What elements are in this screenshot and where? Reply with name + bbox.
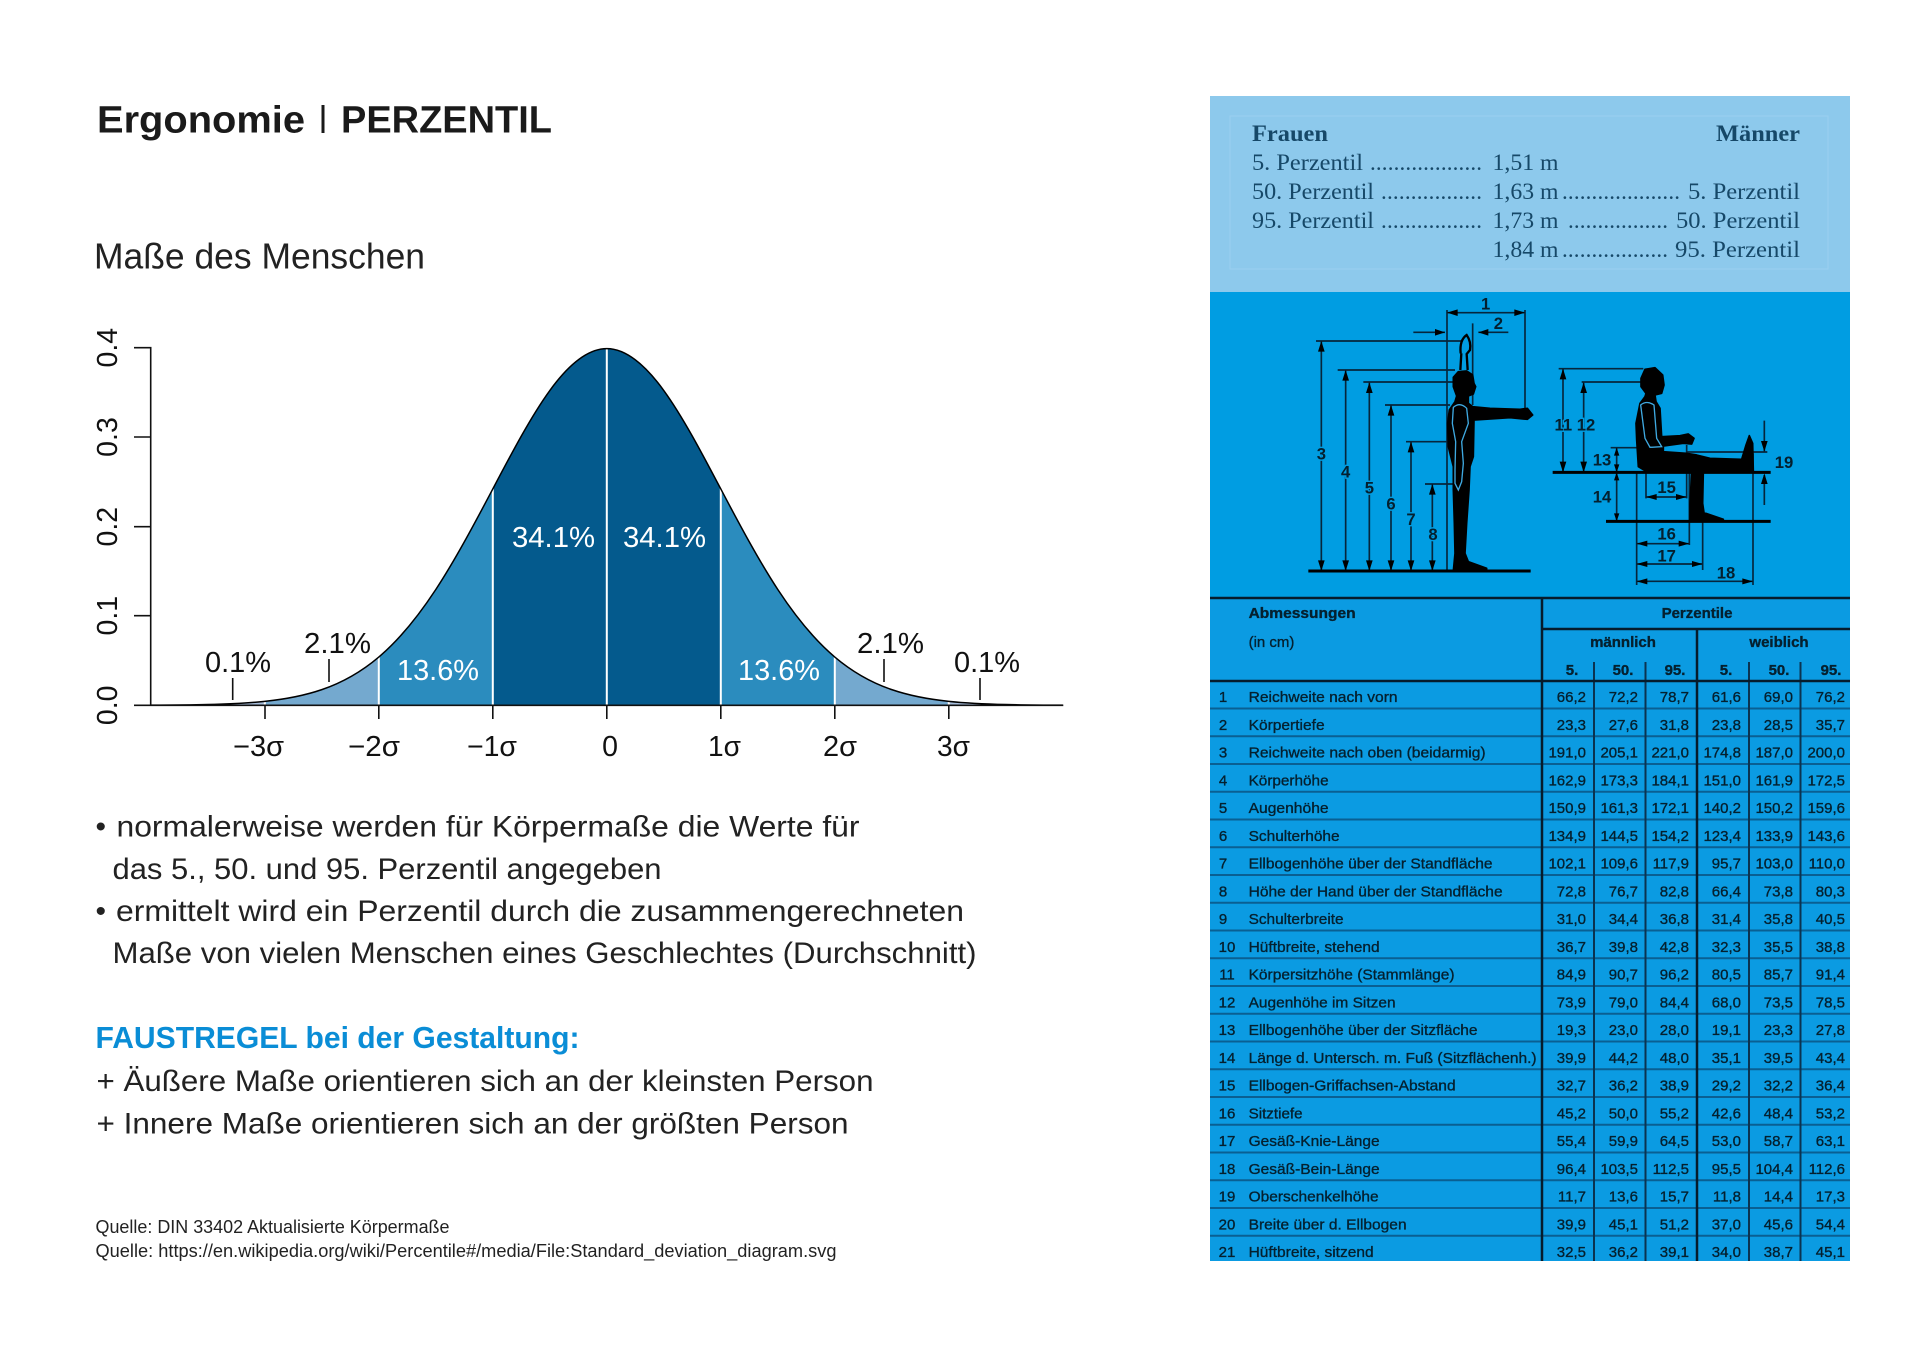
row 4: 162,9 [1548, 772, 1586, 789]
row 17: 55,4 [1557, 1133, 1586, 1150]
sources [96, 1217, 836, 1262]
row 2 [1219, 717, 1845, 734]
panel: percentile heights: ................. [1381, 179, 1482, 204]
row 16: Sitztiefe [1249, 1105, 1303, 1122]
row 18: 96,4 [1557, 1161, 1586, 1178]
row 10: 39,8 [1609, 939, 1638, 956]
table header: Perzentile [1662, 605, 1732, 622]
curve outline [151, 349, 1063, 705]
panel: percentile heights: ................... [1370, 150, 1482, 175]
row 21: 21 [1219, 1244, 1235, 1261]
row 21: 45,1 [1816, 1244, 1845, 1261]
percent labels inside: 34.1% [512, 522, 595, 554]
panel: percentile heights: 50. Perzentil [1252, 179, 1374, 204]
axes: 0.2 [92, 507, 124, 547]
row 5: 159,6 [1807, 800, 1845, 817]
row 19: 13,6 [1609, 1188, 1638, 1206]
axes: 0.3 [92, 417, 124, 457]
row 5: 150,9 [1548, 800, 1586, 817]
bell curve chart [92, 328, 1063, 763]
panel: percentile heights: 1,63 m [1492, 179, 1559, 204]
row 16: 42,6 [1712, 1105, 1741, 1122]
row 14: 35,1 [1712, 1050, 1741, 1067]
percent labels outside: 2.1% [857, 628, 924, 660]
standing figure with dimensions: 5 [1365, 478, 1374, 497]
row 15: 29,2 [1712, 1078, 1741, 1094]
standing figure with dimensions: 1 [1481, 295, 1490, 314]
row 6: Schulterhöhe [1249, 828, 1340, 845]
row 4: 161,9 [1755, 772, 1793, 789]
bullet text: das 5., 50. und 95. Perzentil angegeben [112, 853, 662, 886]
panel: percentile heights: 1,51 m [1492, 150, 1559, 175]
row 9: 36,8 [1660, 911, 1689, 928]
row 17: Gesäß-Knie-Länge [1249, 1133, 1380, 1150]
axes: 2σ [823, 731, 857, 763]
rule of thumb heading: FAUSTREGEL bei der Gestaltung: [96, 1020, 580, 1055]
row 5: 161,3 [1600, 800, 1638, 817]
row 16: 55,2 [1660, 1105, 1689, 1122]
panel: percentile heights: Frauen [1252, 121, 1328, 146]
row 10: 35,5 [1764, 939, 1793, 956]
row 10: 38,8 [1816, 939, 1845, 956]
row 13: 23,0 [1609, 1022, 1638, 1039]
panel: percentile heights: 1,73 m [1492, 208, 1559, 233]
bullet text: Maße von vielen Menschen eines Geschlechtes (Durchschnitt) [112, 937, 976, 970]
row 2: 27,6 [1609, 717, 1638, 734]
row 1: 61,6 [1712, 689, 1741, 706]
row 21: 38,7 [1764, 1244, 1793, 1261]
percent labels outside [205, 628, 1020, 700]
standing figure with dimensions: 8 [1428, 525, 1438, 544]
axes: 0.0 [92, 685, 124, 725]
row 17: 64,5 [1660, 1133, 1689, 1150]
bullet text: ermittelt wird ein Perzentil durch die zusammengerechneten [116, 895, 964, 928]
bullet text [96, 811, 976, 970]
row 19: 11,8 [1713, 1188, 1741, 1206]
row 3: 205,1 [1600, 744, 1638, 762]
standing figure with dimensions: 4 [1341, 462, 1351, 481]
row 18: 112,5 [1653, 1161, 1689, 1178]
seated figure with dimensions: 16 [1657, 525, 1676, 544]
row 19: Oberschenkelhöhe [1249, 1188, 1379, 1206]
table header: 95. [1665, 662, 1685, 679]
row 12: 78,5 [1816, 994, 1845, 1011]
row 11: 11 [1219, 966, 1235, 984]
row 15: 36,4 [1816, 1078, 1845, 1094]
bullet text: • [96, 811, 106, 844]
row 2: 31,8 [1660, 717, 1689, 734]
table header: 50. [1769, 662, 1789, 679]
row 20: 51,2 [1660, 1216, 1689, 1233]
seated figure with dimensions: 18 [1717, 563, 1735, 582]
row 13: 19,1 [1712, 1022, 1741, 1039]
row 13: 23,3 [1764, 1022, 1793, 1039]
row 2: Körpertiefe [1249, 717, 1325, 734]
row 8: 8 [1219, 883, 1227, 900]
row 21: 39,1 [1660, 1244, 1689, 1261]
axes: 1σ [708, 731, 741, 763]
percent labels outside: 0.1% [954, 647, 1020, 679]
row 15: 38,9 [1660, 1078, 1689, 1094]
row 1: 72,2 [1609, 689, 1638, 706]
panel: percentile heights: 5. Perzentil [1688, 179, 1800, 204]
row 14: 39,5 [1764, 1050, 1793, 1067]
row 10: 36,7 [1557, 939, 1586, 956]
row 3: 200,0 [1807, 744, 1845, 762]
row 2: 23,8 [1712, 717, 1741, 734]
rule of thumb lines: + Innere Maße orientieren sich an der größten Person [96, 1108, 849, 1140]
title [97, 100, 552, 142]
row 5: 172,1 [1651, 800, 1689, 817]
row 20: 37,0 [1712, 1216, 1741, 1233]
row 2: 23,3 [1557, 717, 1586, 734]
percent labels inside: 13.6% [738, 655, 820, 687]
row 13: Ellbogenhöhe über der Sitzfläche [1249, 1022, 1478, 1039]
row 4: 184,1 [1651, 772, 1689, 789]
panel: measurement table [1210, 597, 1850, 1261]
row 3: 191,0 [1548, 744, 1586, 762]
row 1: Reichweite nach vorn [1249, 689, 1398, 706]
panel: body measurement figures [1210, 292, 1850, 597]
bullet text: • [96, 895, 106, 928]
row 19: 11,7 [1558, 1188, 1586, 1206]
row 18 [1219, 1161, 1845, 1178]
panel: percentile heights: 1,84 m [1492, 237, 1559, 262]
panel: percentile heights: ................. [1381, 208, 1482, 233]
panel: percentile heights: ................. [1568, 208, 1668, 233]
panel: percentile heights: 95. Perzentil [1252, 208, 1374, 233]
row 6: 154,2 [1651, 828, 1689, 845]
row 18: 18 [1219, 1161, 1235, 1178]
row 16: 50,0 [1609, 1105, 1638, 1122]
row 1: 1 [1219, 689, 1227, 706]
seated figure with dimensions: 14 [1593, 487, 1612, 506]
chart areas [232, 349, 980, 704]
row 4: 151,0 [1703, 772, 1741, 789]
row 14: 44,2 [1609, 1050, 1638, 1067]
rule of thumb lines: + Äußere Maße orientieren sich an der kleinsten Person [96, 1065, 874, 1098]
title: Ergonomie [97, 100, 305, 142]
row 11: Körpersitzhöhe (Stammlänge) [1249, 966, 1455, 984]
percent labels outside: 2.1% [304, 628, 371, 660]
row 20 [1219, 1216, 1845, 1233]
row 9: 34,4 [1609, 911, 1638, 928]
row 16: 53,2 [1816, 1105, 1845, 1122]
row 14 [1219, 1050, 1845, 1067]
row 16: 45,2 [1557, 1105, 1586, 1122]
table header: männlich [1590, 634, 1656, 651]
row 14: 43,4 [1816, 1050, 1845, 1067]
axes: −1σ [467, 731, 517, 763]
row 10: 42,8 [1660, 939, 1689, 956]
row 3: 3 [1219, 744, 1227, 762]
panel: percentile heights: .................... [1562, 179, 1680, 204]
percent labels inside: 34.1% [623, 522, 706, 554]
row 5 [1219, 800, 1845, 817]
row 17: 17 [1219, 1133, 1235, 1150]
row 15: 32,7 [1557, 1078, 1586, 1094]
row 9: 35,8 [1764, 911, 1793, 928]
row 20: 39,9 [1557, 1216, 1586, 1233]
row 12 [1219, 994, 1845, 1011]
row 6: 143,6 [1807, 828, 1845, 845]
row 15: Ellbogen-Griffachsen-Abstand [1249, 1078, 1456, 1094]
row 17: 59,9 [1609, 1133, 1638, 1150]
row 5: 150,2 [1755, 800, 1793, 817]
row 17: 53,0 [1712, 1133, 1741, 1150]
row 14: 39,9 [1557, 1050, 1586, 1067]
bullet text: normalerweise werden für Körpermaße die Werte für [116, 811, 860, 844]
row 13 [1219, 1022, 1845, 1039]
row 2: 2 [1219, 717, 1227, 734]
table header: 95. [1821, 662, 1841, 679]
row 6: 134,9 [1548, 828, 1586, 845]
row 17: 58,7 [1764, 1133, 1793, 1150]
row 3: Reichweite nach oben (beidarmig) [1249, 744, 1486, 762]
row 16: 48,4 [1764, 1105, 1793, 1122]
axes: −3σ [233, 731, 284, 763]
table header: 5. [1566, 662, 1578, 679]
axes: −2σ [348, 731, 400, 763]
row 3: 221,0 [1651, 744, 1689, 762]
row 9: 9 [1219, 911, 1227, 928]
row 21 [1219, 1244, 1845, 1261]
row 16 [1219, 1105, 1845, 1122]
panel: percentile heights: 50. Perzentil [1676, 208, 1800, 233]
row 1 [1219, 689, 1845, 706]
row 11: 91,4 [1816, 966, 1845, 984]
row 12: 73,5 [1764, 994, 1793, 1011]
table header: 5. [1720, 662, 1732, 679]
row 12: 73,9 [1557, 994, 1586, 1011]
row 20: 45,6 [1764, 1216, 1793, 1233]
row 4: Körperhöhe [1249, 772, 1329, 789]
row 21: 34,0 [1712, 1244, 1741, 1261]
row 12: 12 [1219, 994, 1235, 1011]
row 6 [1219, 828, 1845, 845]
row 21: Hüftbreite, sitzend [1249, 1244, 1374, 1261]
row 15: 32,2 [1764, 1078, 1793, 1094]
row 8: 72,8 [1557, 883, 1586, 900]
panel: percentile heights: .................. [1562, 237, 1668, 262]
row 19 [1219, 1188, 1845, 1206]
row 2: 28,5 [1764, 717, 1793, 734]
row 17: 63,1 [1816, 1133, 1845, 1150]
row 9: Schulterbreite [1249, 911, 1344, 928]
row 8: 73,8 [1764, 883, 1793, 900]
title: PERZENTIL [341, 100, 552, 142]
axes: 3σ [937, 731, 970, 763]
row 11 [1219, 966, 1845, 984]
row 4: 4 [1219, 772, 1227, 789]
row 10: Hüftbreite, stehend [1249, 939, 1380, 956]
panel: percentile heights: Männer [1716, 121, 1800, 146]
subtitle: Maße des Menschen [94, 235, 425, 276]
table header: (in cm) [1249, 634, 1294, 651]
row 2: 35,7 [1816, 717, 1845, 734]
row 19: 19 [1219, 1188, 1235, 1206]
row 7: 110,0 [1809, 856, 1845, 872]
row 11: 90,7 [1609, 966, 1638, 984]
row 20: Breite über d. Ellbogen [1249, 1216, 1407, 1233]
row 5: 5 [1219, 800, 1227, 817]
row 18: 112,6 [1809, 1161, 1845, 1178]
row 13: 13 [1219, 1022, 1235, 1039]
row 20: 54,4 [1816, 1216, 1845, 1233]
axes: 0.4 [92, 328, 124, 368]
row 12: 84,4 [1660, 994, 1689, 1011]
row 19: 15,7 [1660, 1188, 1689, 1206]
row 9 [1219, 911, 1845, 928]
row 3: 187,0 [1755, 744, 1793, 762]
row 20: 20 [1219, 1216, 1235, 1233]
standing figure with dimensions: 3 [1317, 445, 1326, 464]
row 8: 82,8 [1660, 883, 1689, 900]
row 3: 174,8 [1703, 744, 1741, 762]
row 8: 66,4 [1712, 883, 1741, 900]
seated figure with dimensions: 19 [1775, 453, 1793, 472]
row 7: 7 [1219, 856, 1227, 872]
seated figure with dimensions [1553, 368, 1793, 585]
row 14: Länge d. Untersch. m. Fuß (Sitzflächenh.) [1249, 1050, 1537, 1067]
row 8: 76,7 [1609, 883, 1638, 900]
row 18: 95,5 [1712, 1161, 1741, 1178]
percent labels inside: 13.6% [397, 655, 479, 687]
row 11: 96,2 [1660, 966, 1689, 984]
row 9: 31,4 [1712, 911, 1741, 928]
seated figure with dimensions: 15 [1657, 478, 1676, 497]
row 1: 76,2 [1816, 689, 1845, 706]
row 9: 31,0 [1557, 911, 1586, 928]
row 18: 103,5 [1600, 1161, 1638, 1178]
row 1: 66,2 [1557, 689, 1586, 706]
row 21: 32,5 [1557, 1244, 1586, 1261]
row 21: 36,2 [1609, 1244, 1638, 1261]
seated figure with dimensions: 12 [1577, 416, 1595, 435]
row 14: 14 [1219, 1050, 1235, 1067]
row 12: Augenhöhe im Sitzen [1249, 994, 1396, 1011]
row 12: 79,0 [1609, 994, 1638, 1011]
panel: percentile heights: 5. Perzentil [1252, 150, 1363, 175]
row 19: 17,3 [1816, 1188, 1845, 1206]
row 15 [1219, 1078, 1845, 1094]
panel: percentile heights [1210, 96, 1850, 292]
row 13: 19,3 [1557, 1022, 1586, 1039]
row 10 [1219, 939, 1845, 956]
row 16: 16 [1219, 1105, 1235, 1122]
row 3 [1219, 744, 1845, 762]
seated figure with dimensions: 13 [1593, 451, 1611, 470]
row 20: 45,1 [1609, 1216, 1638, 1233]
table header: 50. [1613, 662, 1633, 679]
row 4 [1219, 772, 1845, 789]
row 19: 14,4 [1764, 1188, 1793, 1206]
row 4: 172,5 [1807, 772, 1845, 789]
row 7: Ellbogenhöhe über der Standfläche [1249, 856, 1493, 872]
row 1: 78,7 [1660, 689, 1689, 706]
table header: weiblich [1748, 634, 1809, 651]
row 11: 84,9 [1557, 966, 1586, 984]
percent labels inside [397, 522, 820, 687]
row 15: 15 [1219, 1078, 1235, 1094]
axes: 0 [602, 731, 618, 763]
row 14: 48,0 [1660, 1050, 1689, 1067]
row 13: 27,8 [1816, 1022, 1845, 1039]
row 12: 68,0 [1712, 994, 1741, 1011]
rule of thumb lines [96, 1065, 874, 1140]
row 9: 40,5 [1816, 911, 1845, 928]
row 13: 28,0 [1660, 1022, 1689, 1039]
row 7 [1219, 856, 1845, 872]
row 6: 6 [1219, 828, 1227, 845]
sources: Quelle: https://en.wikipedia.org/wiki/Percentile#/media/File:Standard_deviation_diagram.svg [96, 1241, 836, 1262]
row 6: 123,4 [1703, 828, 1741, 845]
row 7: 109,6 [1600, 856, 1638, 872]
row 7: 102,1 [1548, 856, 1586, 872]
percent labels outside: 0.1% [205, 647, 271, 679]
row 7: 103,0 [1755, 856, 1793, 872]
sources: Quelle: DIN 33402 Aktualisierte Körpermaße [96, 1217, 450, 1237]
table header [1249, 605, 1841, 679]
row 15: 36,2 [1609, 1078, 1638, 1094]
row 4: 173,3 [1600, 772, 1638, 789]
row 8 [1219, 883, 1845, 900]
seated figure with dimensions: 11 [1555, 416, 1572, 435]
row 18: Gesäß-Bein-Länge [1249, 1161, 1380, 1178]
row 18: 104,4 [1755, 1161, 1793, 1178]
row 17 [1219, 1133, 1845, 1150]
axes [92, 328, 1063, 763]
row 10: 32,3 [1712, 939, 1741, 956]
row 10: 10 [1219, 939, 1235, 956]
axes: 0.1 [92, 596, 124, 636]
row 8: 80,3 [1816, 883, 1845, 900]
row 1: 69,0 [1764, 689, 1793, 706]
standing figure with dimensions: 7 [1406, 510, 1416, 529]
row 6: 144,5 [1600, 828, 1638, 845]
seated figure with dimensions: 17 [1657, 547, 1676, 566]
row 6: 133,9 [1755, 828, 1793, 845]
row 11: 85,7 [1764, 966, 1793, 984]
table header: Abmessungen [1249, 605, 1356, 622]
table grid [1210, 598, 1850, 1261]
row 8: Höhe der Hand über der Standfläche [1249, 883, 1503, 900]
standing figure with dimensions: 6 [1386, 494, 1396, 513]
row 7: 95,7 [1712, 856, 1741, 872]
row 11: 80,5 [1712, 966, 1741, 984]
row 5: 140,2 [1703, 800, 1741, 817]
standing figure with dimensions: 2 [1494, 314, 1503, 333]
row 7: 117,9 [1653, 856, 1689, 872]
panel: percentile heights: 95. Perzentil [1675, 237, 1800, 262]
row 5: Augenhöhe [1249, 800, 1329, 817]
standing figure with dimensions [1308, 295, 1533, 571]
